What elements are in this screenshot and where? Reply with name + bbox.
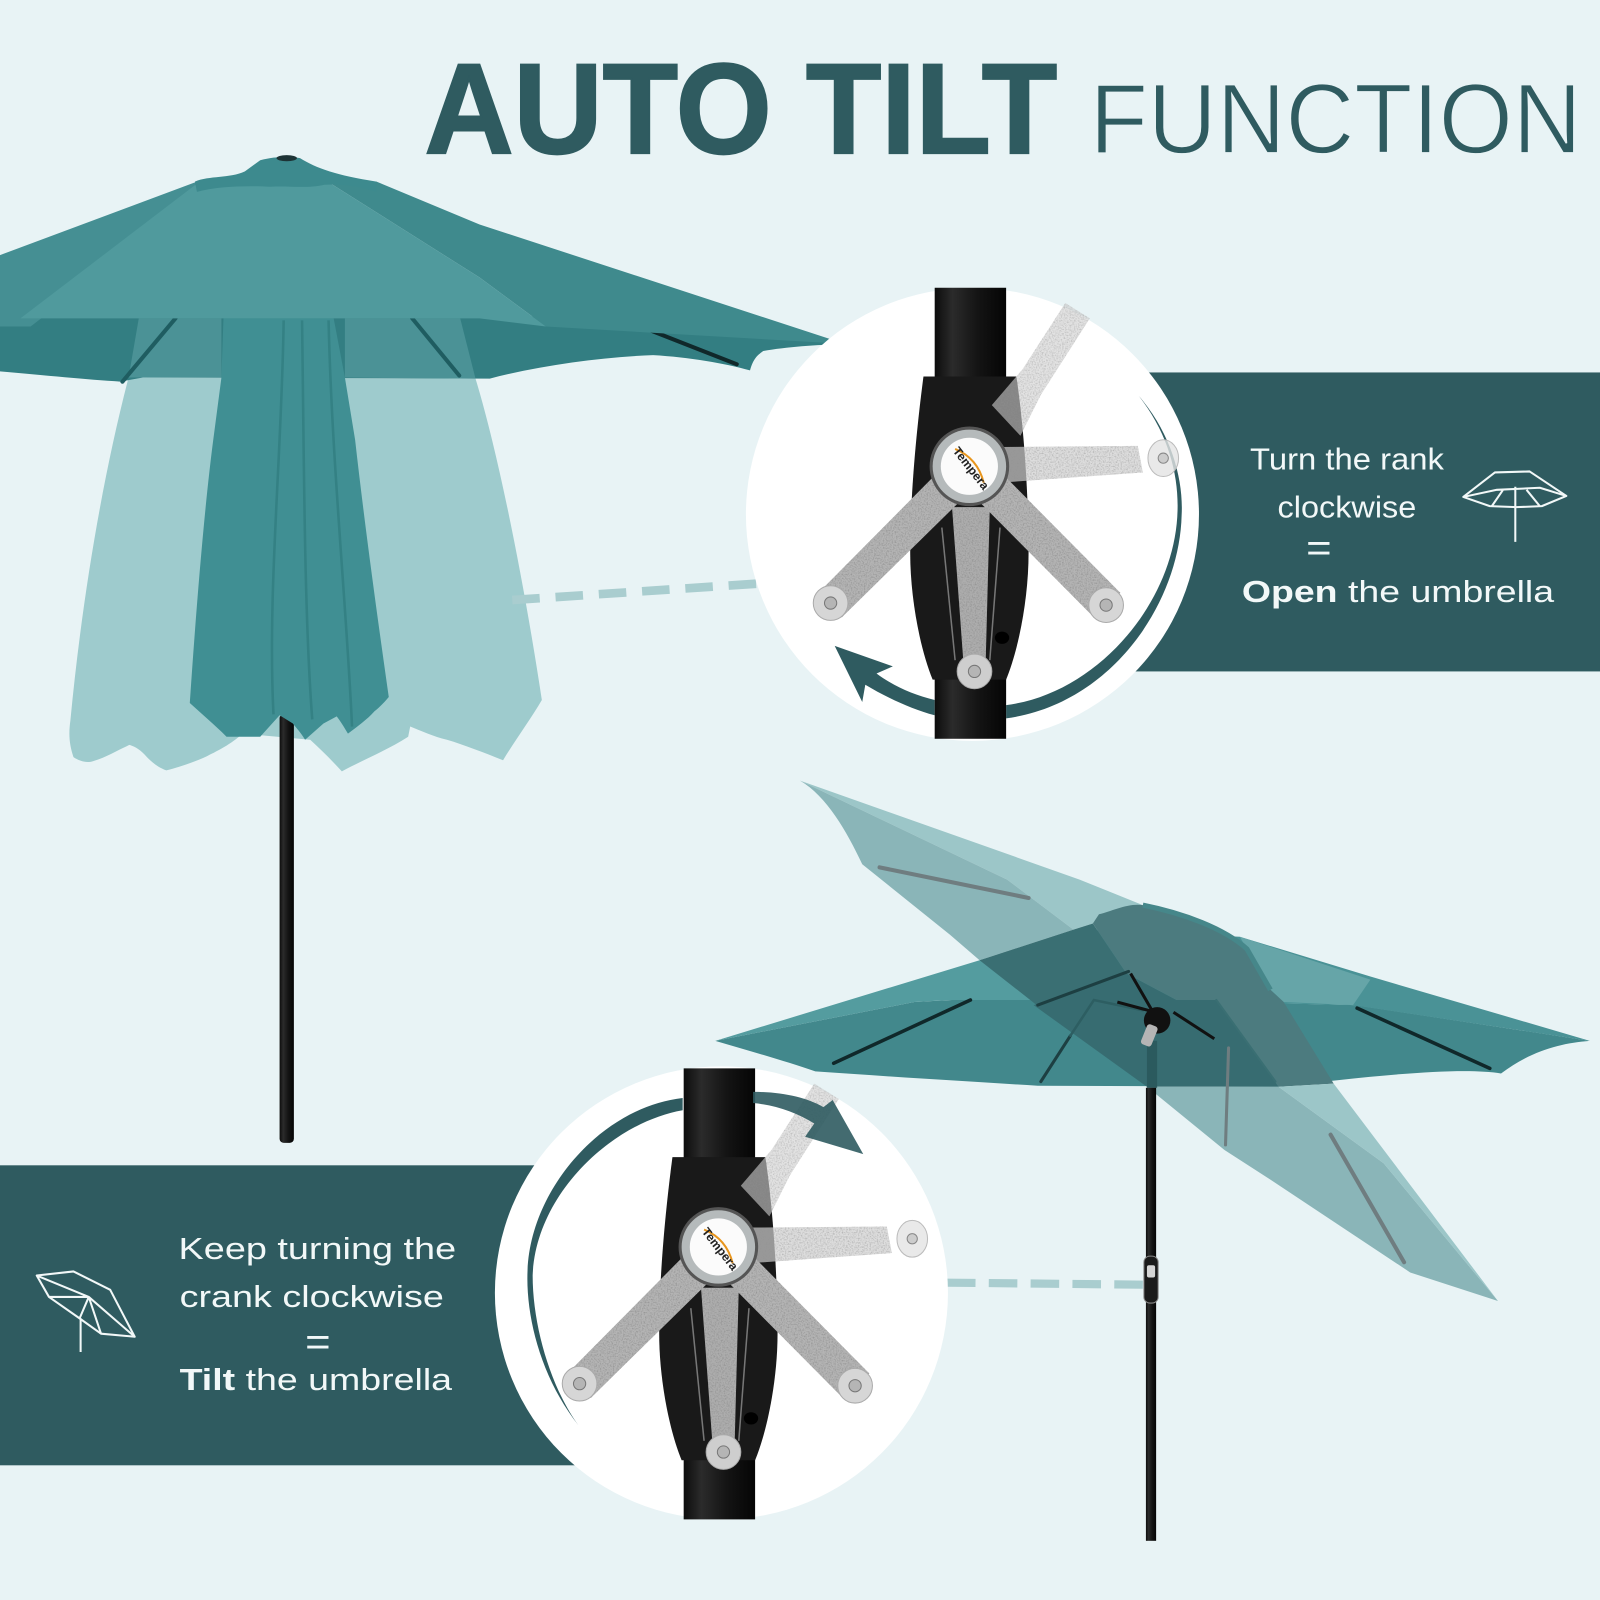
- horizontal canopy underside: [715, 997, 1590, 1087]
- collar: [1140, 1023, 1158, 1047]
- text: tilt instruction: [179, 1232, 456, 1397]
- tilted canopy cap: [1093, 905, 1334, 1087]
- dashed connector: open: [512, 584, 757, 600]
- tilted and open umbrella illustration: [715, 781, 1590, 1541]
- text: open instruction: clockwise: [1278, 490, 1416, 524]
- circle: open crank detail: [746, 288, 1199, 741]
- tilted canopy light top band: [800, 781, 1143, 930]
- text: open instruction: Open the umbrella: [1242, 575, 1555, 609]
- tilted canopy underside left: [800, 781, 1073, 960]
- circle: tilt crank detail: [495, 1066, 948, 1519]
- canopy left panel: [0, 182, 219, 327]
- text: tilt instruction: =: [305, 1321, 331, 1364]
- canopy right panel: [324, 180, 845, 344]
- hub: [1144, 1007, 1170, 1034]
- pole lower: [1146, 1088, 1156, 1541]
- pale right strip: [1240, 937, 1370, 1005]
- text: open instruction: =: [1306, 527, 1332, 570]
- crank logo: Tempera: [950, 444, 992, 493]
- horizontal canopy ribs: [834, 1000, 1490, 1082]
- hub spokes: [1117, 973, 1214, 1039]
- underside translucent overlays: [129, 318, 476, 379]
- text: open instruction: [1242, 442, 1555, 609]
- text: tilt instruction: Tilt the umbrella: [180, 1363, 453, 1397]
- pole crank collar: [1144, 1256, 1158, 1303]
- canopy centre panel: [20, 180, 546, 327]
- canopy vent: [195, 157, 377, 192]
- horizontal canopy top right: [1084, 930, 1590, 1041]
- pole: [280, 714, 294, 1143]
- text: tilt instruction: crank clockwise: [180, 1280, 444, 1314]
- drape pleats: [272, 320, 352, 727]
- arrow: sweep left side: [527, 1098, 683, 1426]
- vent cap: [277, 155, 297, 161]
- pole upper translucent: [1147, 1041, 1157, 1088]
- crank logo: Tempera: [699, 1225, 741, 1273]
- translucent folded canopy: [69, 378, 542, 771]
- dashed connector: tilt: [947, 1283, 1145, 1285]
- crank handle: [562, 1068, 928, 1519]
- tilted canopy lower underside: [1147, 1087, 1498, 1301]
- arrow: counter sweep of crank: [835, 396, 1182, 718]
- panel: open instruction: [1122, 372, 1600, 671]
- open umbrella illustration: [0, 155, 845, 1143]
- crank handle: [813, 288, 1179, 739]
- canopy underside dark: [0, 316, 845, 382]
- horizontal canopy top left: [715, 930, 1122, 1041]
- title: FUNCTION: [1090, 63, 1582, 174]
- central folded drape: [190, 318, 389, 740]
- text: open instruction: Turn the rank: [1250, 442, 1445, 476]
- overlap with horizontal top: [980, 923, 1127, 1005]
- text: tilt instruction: Keep turning the: [179, 1232, 456, 1266]
- icon: tilted umbrella: [37, 1271, 135, 1352]
- overlap with horizontal underside: [1034, 973, 1279, 1087]
- title: [424, 38, 1582, 181]
- title: AUTO TILT: [424, 38, 1057, 181]
- icon: open umbrella: [1463, 471, 1566, 542]
- arrow head: tilt: [753, 1092, 863, 1154]
- panel: tilt instruction: [0, 1165, 582, 1465]
- canopy ribs: [122, 318, 737, 382]
- tilted canopy ribs: [880, 867, 1404, 1262]
- tilted canopy ruffle: [1143, 905, 1270, 990]
- tilted canopy lower light band: [1279, 1084, 1498, 1301]
